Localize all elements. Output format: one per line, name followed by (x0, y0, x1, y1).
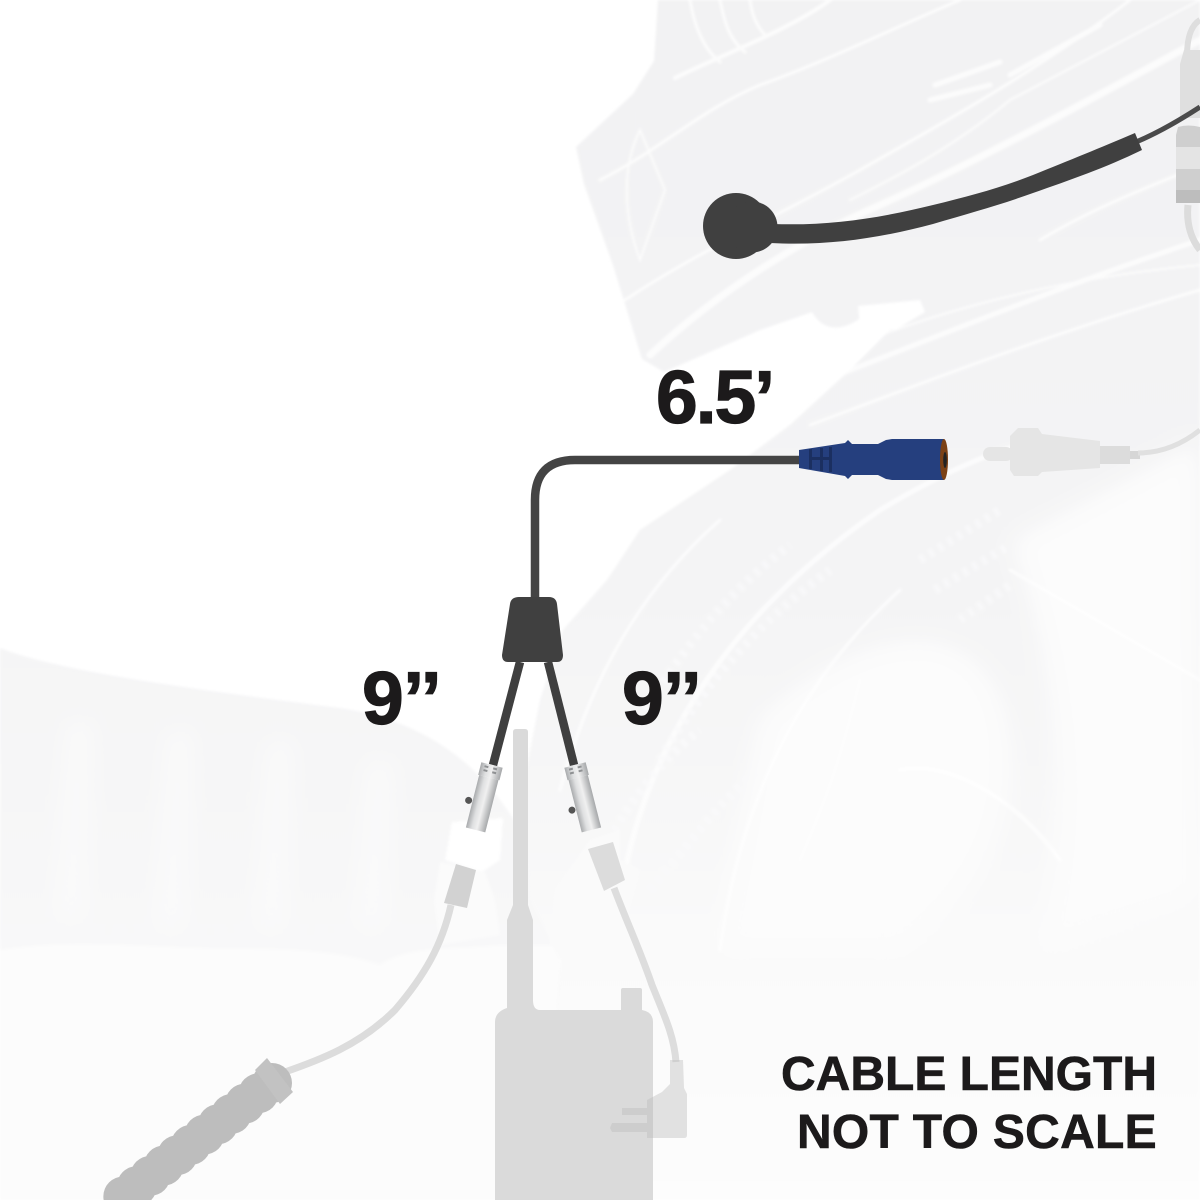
mic foam (703, 193, 769, 259)
torso seams (560, 440, 1200, 950)
Y splitter (502, 597, 563, 662)
copper tip (940, 439, 948, 480)
boom (770, 133, 1142, 244)
ghost photo: glove cuffs (434, 818, 640, 945)
strain relief ribs (809, 447, 832, 472)
ghost photo: helmet and torso (520, 0, 1200, 1200)
note: cable length not to scale: CABLE LENGTH (781, 1048, 1157, 1101)
note: cable length not to scale (781, 1048, 1157, 1159)
icon: coiled cord (120, 1083, 272, 1199)
label: 9 inches right: 9’’ (622, 656, 701, 740)
boom cable (1136, 107, 1200, 142)
ghost cable and coil, left (120, 864, 476, 1199)
torso soft highlights (720, 440, 1200, 950)
white chin patch (858, 300, 925, 330)
headset microphone with boom (703, 107, 1200, 259)
label: 9 inches left: 9’’ (362, 656, 441, 740)
right leg cable (548, 662, 574, 765)
ghost plug, right of blue connector (983, 428, 1200, 476)
main cable (535, 460, 803, 600)
ghost photo: driver arm and lap (0, 648, 560, 1200)
silver connector, right (558, 762, 602, 834)
note: cable length not to scale: NOT TO SCALE (797, 1106, 1157, 1159)
ghost cable and plug, right (588, 842, 687, 1138)
blue connector (799, 439, 948, 480)
ghost radio (495, 729, 653, 1200)
ghost earpiece cable, top right (1180, 20, 1200, 250)
helmet white highlights (600, 0, 1200, 425)
ghost silver connector, top right (1176, 126, 1200, 203)
ghost zipper and badge texture (590, 510, 1010, 890)
silver connector, left (459, 761, 503, 833)
label: 6.5 feet: 6.5’ (656, 355, 773, 439)
left leg cable (493, 662, 520, 765)
